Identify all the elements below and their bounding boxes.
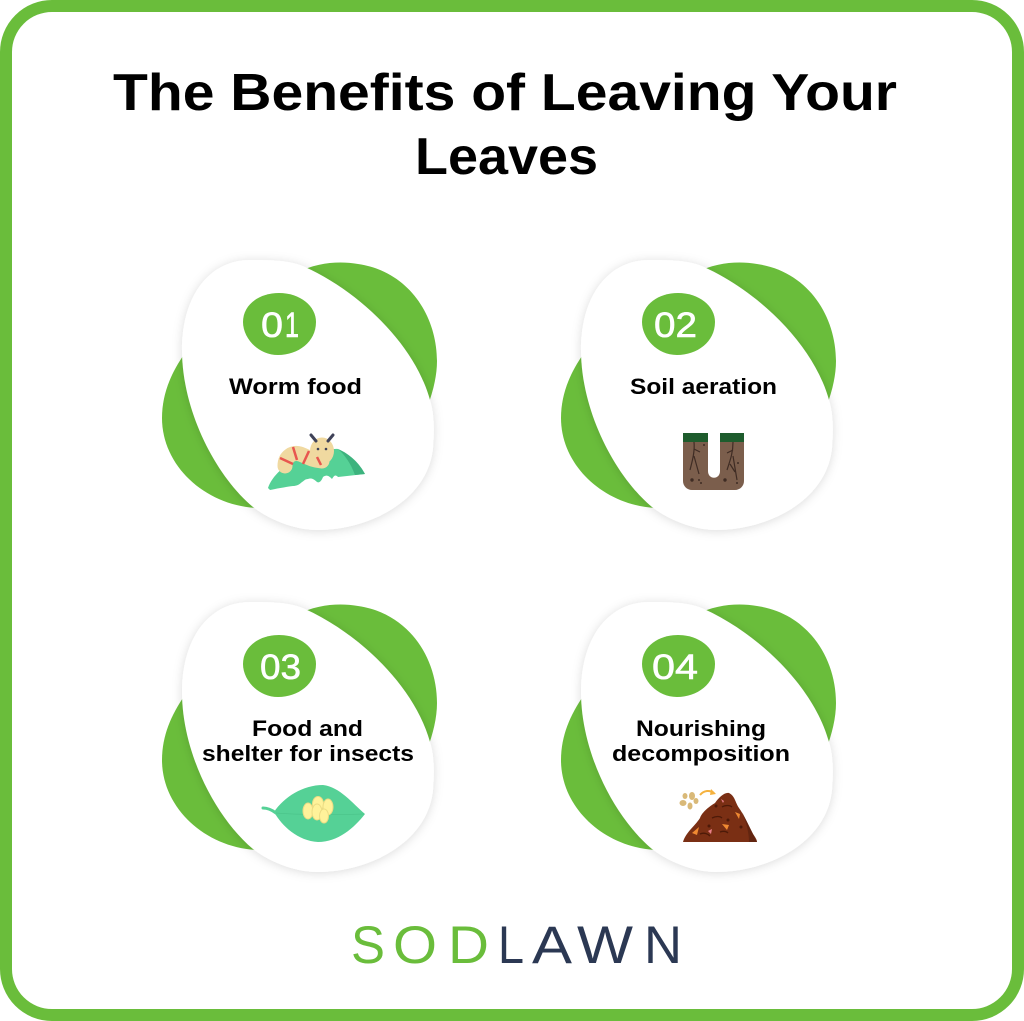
heading: food and shelter: shelter for insects [202, 741, 414, 766]
heading: nourishing decomposition: decomposition [612, 741, 790, 766]
logo: SODLAWN: O [393, 916, 437, 975]
panel: nourishing decomposition [561, 602, 836, 872]
title: Leaves [415, 128, 598, 186]
icon: soil cross-section [683, 433, 744, 490]
panel: food and shelter for insects [162, 602, 437, 872]
logo: SODLAWN: L [498, 916, 524, 975]
heading: nourishing decomposition: Nourishing [636, 716, 766, 741]
logo: SODLAWN: W [577, 916, 633, 975]
icon: caterpillar on leaf [268, 435, 365, 490]
panel: soil aeration [561, 260, 836, 530]
heading: food and shelter [202, 716, 414, 766]
heading: worm food: Worm food [229, 374, 362, 399]
number 03: 03 [260, 648, 301, 687]
panel: worm food [162, 260, 437, 530]
logo: SODLAWN: D [448, 916, 489, 975]
logo: SODLAWN: N [644, 916, 682, 975]
number 01: 1 [285, 306, 299, 345]
title [113, 64, 897, 186]
icon: compost pile [680, 789, 757, 842]
number 04: 04 [652, 648, 698, 687]
heading: soil aeration: Soil aeration [630, 374, 777, 399]
icon: leaf with eggs [263, 785, 365, 842]
heading: nourishing decomposition [612, 716, 790, 766]
title: The Benefits of Leaving Your [113, 64, 897, 122]
logo: SODLAWN: A [532, 916, 573, 975]
logo: SODLAWN: S [351, 916, 385, 975]
number 01 [261, 306, 299, 345]
heading: food and shelter: Food and [252, 716, 363, 741]
logo: SODLAWN [351, 916, 682, 975]
number 02: 02 [654, 306, 697, 345]
number 01: 0 [261, 306, 283, 345]
